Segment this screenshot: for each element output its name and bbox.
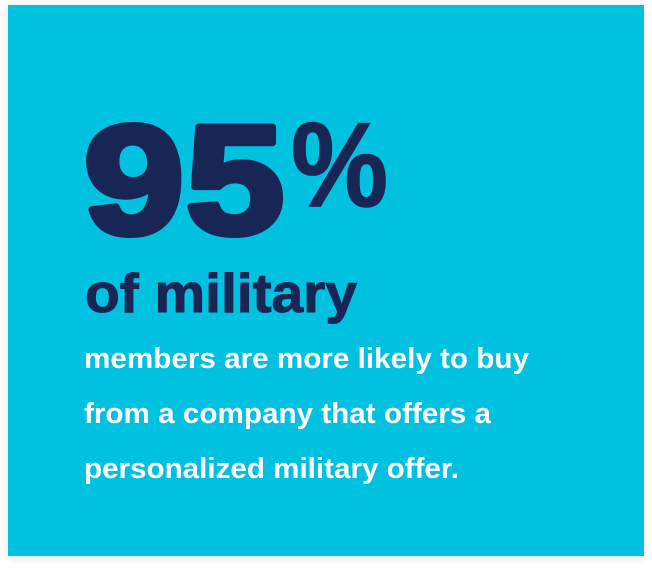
line 2: from a company that offers a [84, 398, 492, 430]
line 1: members are more likely to buy [84, 343, 529, 375]
digit 9: 9 [84, 94, 184, 266]
digit 5: 5 [186, 94, 284, 266]
statistic: 95% [84, 94, 388, 266]
body text [84, 343, 529, 485]
percent sign: % [291, 98, 388, 232]
line 3: personalized military offer. [84, 453, 459, 485]
subheading: of military: of military [85, 262, 357, 324]
